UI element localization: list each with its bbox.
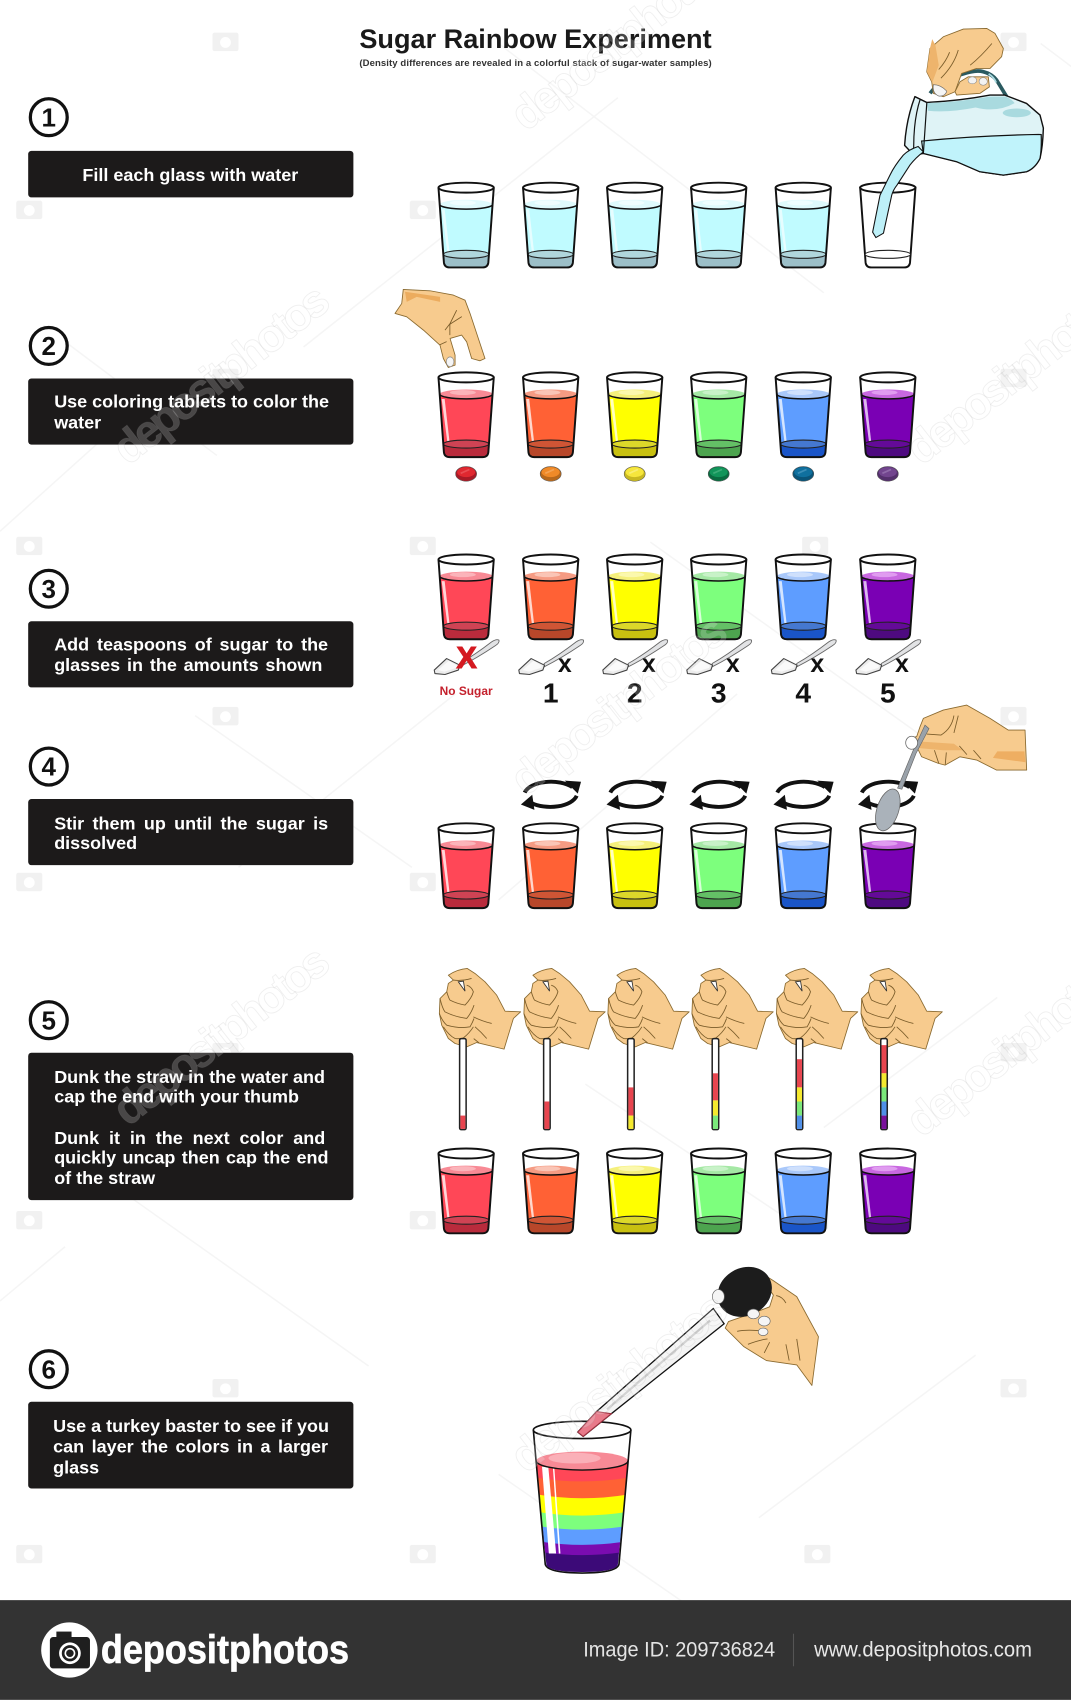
step 2 number: 2 <box>42 331 56 361</box>
sugar spoons and amounts: 5 <box>880 677 896 709</box>
step 6 instruction: glass <box>53 1457 99 1477</box>
coloring tablets <box>456 466 898 481</box>
image id: Image ID: 209736824 <box>583 1639 775 1662</box>
diagonal depositphotos watermarks: depositphotos <box>501 604 737 805</box>
step 3 number <box>30 570 67 607</box>
step 4 instruction: dissolved <box>54 833 137 853</box>
step 1 instruction <box>28 151 353 197</box>
step 2 instruction: Use coloring tablets to color the <box>54 392 329 412</box>
step 4 number <box>30 748 67 785</box>
step 4 instruction: Stir them up until the sugar is <box>54 813 328 833</box>
sugar spoons and amounts: 3 <box>711 677 727 709</box>
row 5: glasses for dunking <box>438 1149 915 1233</box>
pitcher pouring water, held by hand <box>873 28 1043 238</box>
sugar spoons and amounts: x <box>895 650 909 678</box>
title: Sugar Rainbow Experiment <box>359 23 712 54</box>
step 6 instruction: can layer the colors in a larger <box>53 1437 328 1457</box>
sugar spoons and amounts: 4 <box>795 677 811 709</box>
large rainbow glass <box>531 1421 634 1577</box>
step 3 instruction: Add teaspoons of sugar to the <box>54 635 328 655</box>
straw 4 <box>712 1039 719 1130</box>
step 3 number: 3 <box>42 574 56 604</box>
straw 5 <box>796 1039 803 1130</box>
step 5 number <box>30 1002 67 1039</box>
step 1 instruction: Fill each glass with water <box>82 165 298 185</box>
step 6 instruction <box>28 1402 353 1488</box>
sugar spoons and amounts: x <box>642 650 656 678</box>
row 2: coloured glasses <box>438 372 915 457</box>
step 3 instruction: glasses in the amounts shown <box>54 655 322 675</box>
step 4 number: 4 <box>42 752 57 782</box>
sugar spoons and amounts: x <box>726 650 740 678</box>
baster dropper <box>578 1309 724 1436</box>
step 5 number: 5 <box>42 1005 56 1035</box>
sugar spoons and amounts: X <box>457 642 477 675</box>
diagonal depositphotos watermarks: depositphotos <box>103 274 339 474</box>
step 5 instruction: cap the end with your thumb <box>54 1087 299 1107</box>
step 6 instruction: Use a turkey baster to see if you <box>53 1416 329 1436</box>
diagonal depositphotos watermarks <box>103 0 1071 1482</box>
step 5 instruction: Dunk the straw in the water and <box>54 1067 325 1087</box>
step 5 instruction: of the straw <box>54 1168 156 1188</box>
hand stirring with spoon <box>871 705 1027 834</box>
website: www.depositphotos.com <box>813 1639 1032 1662</box>
depositphotos camera logo <box>41 1622 98 1678</box>
stirring arrows <box>521 781 918 810</box>
step 1 number <box>30 99 67 136</box>
straw 6 <box>881 1039 887 1130</box>
sugar spoons and amounts <box>434 640 921 709</box>
step 5 instruction: Dunk it in the next color and <box>54 1128 325 1148</box>
straw 3 <box>628 1039 634 1130</box>
straw 1 <box>460 1039 466 1130</box>
step 3 instruction <box>28 621 353 687</box>
sugar spoons and amounts: No Sugar <box>440 684 493 698</box>
step 2 instruction: water <box>53 412 101 432</box>
step 1 number: 1 <box>42 102 56 132</box>
sugar spoons and amounts: 1 <box>543 677 559 709</box>
diagonal depositphotos watermarks: depositphotos <box>103 935 339 1135</box>
pointing hand dropping tablet <box>395 289 485 368</box>
footer separator <box>793 1634 794 1666</box>
step 4 instruction <box>28 799 353 865</box>
subtitle: (Density differences are revealed in a colorful stack of sugar-water samples) <box>359 58 712 69</box>
sugar spoons and amounts: x <box>558 650 572 678</box>
footer band <box>0 1600 1071 1700</box>
step 5 instruction <box>28 1053 353 1200</box>
hand squeezing baster bulb <box>708 1257 818 1386</box>
sugar spoons and amounts: x <box>810 650 824 678</box>
row 4: glasses being stirred <box>438 823 915 908</box>
straw 2 <box>544 1039 550 1130</box>
step 2 number <box>30 328 67 364</box>
fists holding straws <box>439 968 942 1049</box>
row 3: glasses before adding sugar <box>438 554 915 639</box>
step 6 number: 6 <box>42 1354 56 1384</box>
diagonal depositphotos watermarks: depositphotos <box>501 1282 737 1482</box>
step 2 instruction <box>28 378 353 445</box>
step 5 instruction: quickly uncap then cap the end <box>54 1147 329 1167</box>
row 1: water glasses <box>438 183 915 267</box>
sugar spoons and amounts: 2 <box>627 677 643 709</box>
step 6 number <box>30 1351 67 1388</box>
depositphotos wordmark: depositphotos <box>101 1628 349 1672</box>
